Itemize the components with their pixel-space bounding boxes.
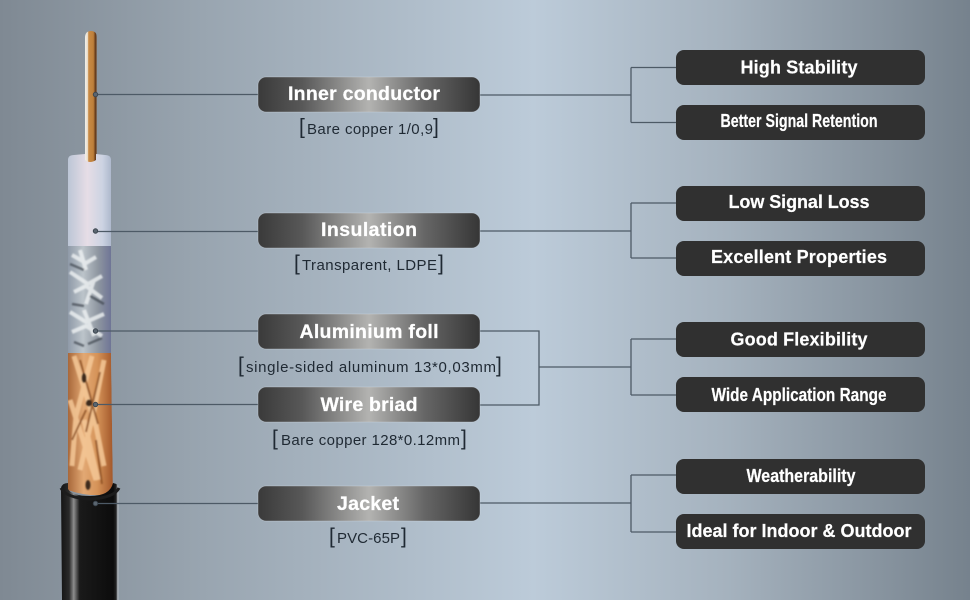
component: aluminium foil: ] (496, 354, 502, 377)
component: insulation: Transparent, LDPE (302, 257, 437, 274)
component: inner conductor: Inner conductor (288, 83, 440, 105)
component: aluminium foil: single-sided aluminum 13*0,03mm (246, 359, 496, 376)
component: aluminium foil: [ (238, 354, 244, 377)
component: jacket: Jacket (337, 493, 400, 515)
component: jacket: [ (329, 525, 335, 548)
component: insulation: Insulation (321, 219, 417, 241)
benefit: ideal for indoor and outdoor: Ideal for Indoor & Outdoor (686, 521, 912, 541)
component: aluminium foil (238, 314, 502, 377)
component: inner conductor: ] (433, 116, 439, 138)
benefit: good flexibility (676, 322, 925, 357)
component: aluminium foil: Aluminium foll (300, 321, 438, 343)
component: wire braid: ] (461, 427, 467, 450)
benefit: high stability: High Stability (740, 58, 858, 78)
cable: aluminium foil (68, 246, 111, 353)
benefit: better signal retention (676, 105, 925, 140)
component: jacket: ] (401, 525, 407, 548)
benefit: wide application range (676, 377, 925, 412)
connector lines: right branches (480, 68, 676, 532)
benefit: wide application range: Wide Application Range (712, 385, 886, 405)
component: wire braid (258, 387, 480, 450)
connector lines: left callouts (95, 94, 258, 504)
component: wire braid: Bare copper 128*0.12mm (281, 432, 460, 449)
benefit: excellent properties (676, 241, 925, 276)
cable: copper wire braid (68, 353, 113, 495)
benefit: good flexibility: Good Flexibility (730, 330, 868, 350)
component: insulation: ] (438, 252, 444, 275)
cable illustration (61, 31, 119, 600)
benefit: low signal loss: Low Signal Loss (728, 192, 870, 212)
component: insulation: [ (294, 252, 300, 275)
component: jacket (258, 486, 480, 548)
callout dots (93, 92, 98, 506)
component: inner conductor (258, 77, 480, 138)
cable: black PVC jacket (61, 483, 119, 600)
benefit: high stability (676, 50, 925, 85)
benefit: ideal for indoor and outdoor (676, 514, 925, 549)
benefit: low signal loss (676, 186, 925, 221)
component: inner conductor: [ (299, 116, 305, 138)
benefit: weatherability: Weatherability (746, 466, 856, 486)
component: wire braid: [ (272, 427, 278, 450)
cable: inner copper conductor (85, 31, 97, 165)
benefit: better signal retention: Better Signal Retention (720, 111, 878, 131)
component: wire braid: Wire briad (320, 394, 418, 416)
cable: transparent insulation (68, 154, 111, 246)
component: insulation (258, 213, 480, 275)
component: inner conductor: Bare copper 1/0,9 (307, 121, 433, 138)
benefit: excellent properties: Excellent Properties (711, 247, 887, 267)
benefit: weatherability (676, 459, 925, 494)
component: jacket: PVC-65P (337, 530, 400, 547)
